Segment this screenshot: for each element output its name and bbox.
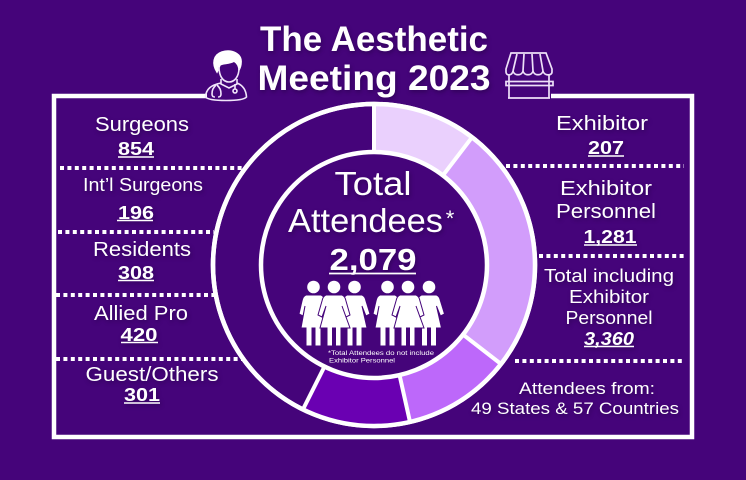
footnote (328, 350, 434, 364)
stat: total including exhibitor personnel: Personnel (566, 308, 652, 328)
stat: total including exhibitor personnel: Total including (544, 266, 674, 286)
outer and inner rings (213, 104, 535, 426)
stat: allied pro: 420 (120, 325, 158, 345)
content frame (54, 96, 692, 437)
stat: attendees origin: 49 States & 57 Countries (471, 399, 679, 418)
center text: total attendees: Attendees (288, 202, 443, 239)
stat: total including exhibitor personnel (544, 266, 674, 349)
right stats (471, 113, 679, 418)
stat: allied pro: Allied Pro (94, 303, 188, 325)
dark remainder ring (213, 104, 535, 426)
slice: exhibitor personnel (443, 137, 535, 364)
stat: guest and others: 301 (124, 385, 160, 405)
stat: exhibitor (556, 113, 648, 158)
title: The Aesthetic (260, 20, 488, 59)
stat: international surgeons: Int’l Surgeons (83, 175, 203, 195)
stat: total including exhibitor personnel: 3,360 (584, 329, 634, 349)
stat: total including exhibitor personnel: Exhibitor (569, 287, 649, 307)
stat: residents: Residents (93, 239, 191, 261)
center text: total attendees (288, 165, 455, 277)
stat: international surgeons (83, 175, 203, 223)
title (258, 20, 490, 98)
icon: exhibitor booth (506, 53, 553, 98)
stat: exhibitor personnel (556, 178, 656, 247)
stat: guest and others: Guest/Others (86, 364, 218, 386)
stat: residents (93, 239, 191, 283)
panel: donut chart (213, 104, 535, 426)
footnote: *Total Attendees do not include (328, 350, 434, 357)
stat: surgeons (95, 114, 189, 159)
footnote: Exhibitor Personnel (329, 358, 396, 364)
stat: international surgeons: 196 (118, 203, 154, 223)
slice: residents group (400, 335, 501, 422)
slice: exhibitor (374, 104, 472, 175)
icon: group of people (299, 281, 444, 346)
title: Meeting 2023 (258, 59, 490, 98)
stat: surgeons: 854 (118, 139, 154, 159)
center text: total attendees: * (446, 206, 455, 231)
center text: total attendees: Total (334, 165, 412, 202)
stat: attendees origin: Attendees from: (519, 379, 655, 398)
slice: surgeons group (303, 366, 410, 426)
stat: residents: 308 (118, 263, 154, 283)
stat: guest and others (86, 364, 218, 405)
icon: surgeon (206, 51, 246, 100)
stat: attendees origin (471, 379, 679, 418)
stat: allied pro (94, 303, 188, 345)
stat: exhibitor personnel: Exhibitor (560, 178, 652, 200)
stat: surgeons: Surgeons (95, 114, 189, 136)
stat: exhibitor: 207 (588, 138, 624, 158)
right dotted dividers (506, 166, 684, 361)
left stats (83, 114, 218, 405)
stat: exhibitor personnel: Personnel (556, 201, 656, 223)
center text: total attendees: 2,079 (330, 242, 416, 277)
left dotted dividers (56, 168, 244, 359)
slice dividers (303, 104, 501, 422)
stat: exhibitor: Exhibitor (556, 113, 648, 135)
stat: exhibitor personnel: 1,281 (584, 227, 636, 247)
